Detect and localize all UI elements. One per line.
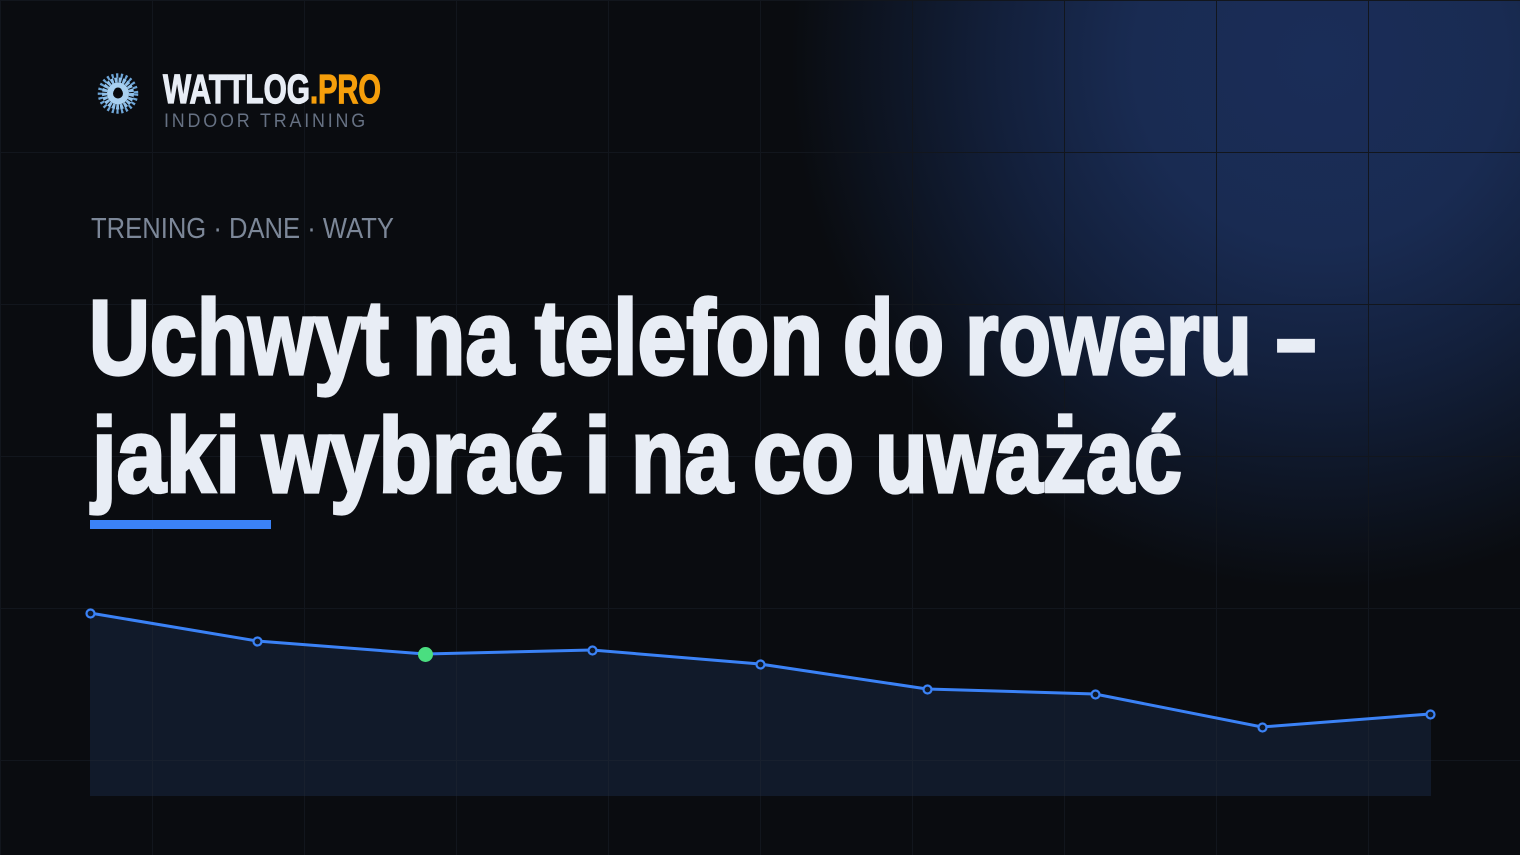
chart line <box>90 613 1430 727</box>
title: i <box>584 397 611 515</box>
title <box>89 279 1316 515</box>
chart area <box>90 613 1431 796</box>
title: jaki <box>90 397 240 515</box>
logo tagline: INDOOR TRAINING <box>164 111 368 132</box>
title: na <box>412 279 515 397</box>
icon: cassette gear <box>100 76 136 112</box>
title: na <box>631 397 734 515</box>
logo <box>100 66 381 132</box>
title: uważać <box>875 397 1182 515</box>
title: telefon <box>535 279 823 397</box>
title: – <box>1276 279 1316 397</box>
chart points <box>86 610 1434 732</box>
title underline <box>90 520 271 529</box>
title: wybrać <box>261 397 563 515</box>
logo wordmark: WATTLOG <box>163 66 310 112</box>
title: co <box>753 397 854 515</box>
line chart <box>86 610 1434 796</box>
title: roweru <box>965 279 1252 397</box>
eyebrow text: TRENING · DANE · WATY <box>91 213 394 245</box>
logo wordmark: .PRO <box>310 66 381 112</box>
title: do <box>843 279 944 397</box>
title: Uchwyt <box>89 279 389 397</box>
highlighted point <box>418 647 433 662</box>
